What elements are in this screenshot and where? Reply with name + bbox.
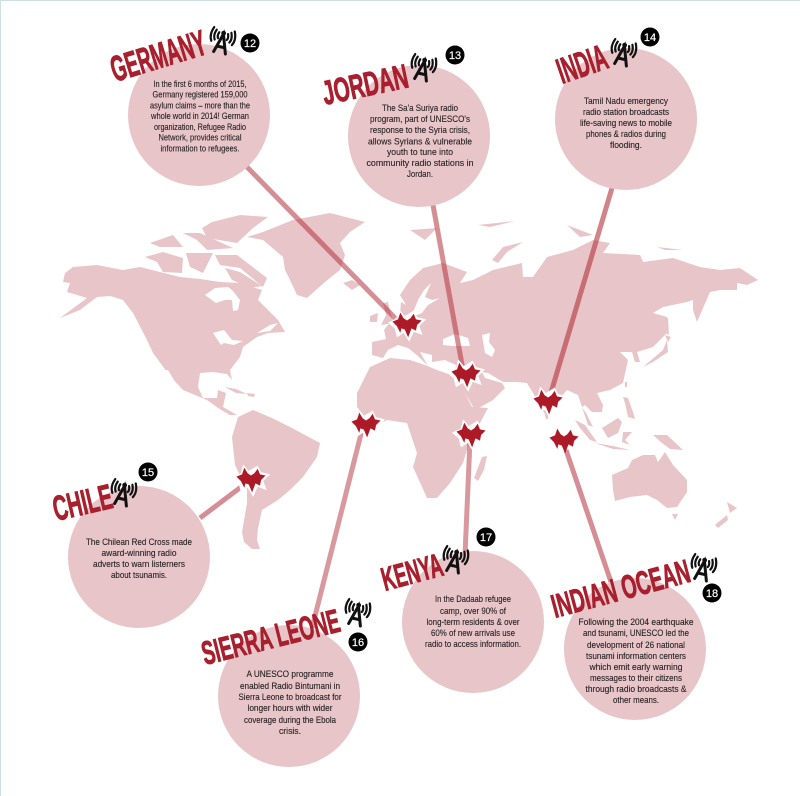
New Zealand [727, 502, 737, 513]
text: Indian Ocean: which emit early warning [589, 661, 682, 672]
number badge: 13 [446, 46, 464, 64]
North America [60, 265, 285, 415]
icon: radio antenna [343, 599, 371, 627]
text: Indian Ocean: tsunami information centers [586, 650, 686, 661]
number badge: 16 [348, 632, 368, 652]
text: Kenya: In the Dadaab refugee [435, 593, 511, 604]
burst marker: India [529, 386, 567, 419]
heading: Indian Ocean: INDIAN OCEAN [547, 552, 694, 625]
text: Sierra Leone: Sierra Leone to broadcast for [238, 691, 342, 702]
heading: Jordan: JORDAN [319, 58, 412, 113]
text: Jordan: allows Syrians & vulnerable [368, 136, 472, 146]
text: Chile [86, 536, 192, 580]
text: Jordan: community radio stations in [366, 157, 474, 168]
heading: India: INDIA [551, 36, 613, 92]
text: Indian Ocean [578, 616, 694, 705]
number badge: 16: 16 [352, 637, 364, 649]
text: Germany: information to refugees. [160, 142, 240, 154]
panel: Jordan [319, 46, 490, 207]
text: India: flooding. [610, 139, 642, 150]
text: Sierra Leone: A UNESCO programme [246, 668, 334, 679]
connector: India [550, 188, 612, 396]
text: Kenya: radio to access information. [425, 638, 521, 649]
number badge: 18: 18 [706, 588, 718, 600]
text: Jordan: response to the Syria crisis, [370, 124, 470, 135]
text: Jordan: Jordan. [407, 168, 433, 179]
number badge: 12 [240, 34, 260, 52]
heading: Sierra Leone: SIERRA LEONE [198, 602, 344, 672]
number badge: 12: 12 [244, 38, 256, 50]
text: India: Tamil Nadu emergency [584, 95, 668, 106]
Northern islands [492, 242, 523, 263]
text: Germany: asylum claims – more than the [150, 100, 250, 110]
number badge: 18 [702, 584, 722, 602]
text: Sierra Leone: longer hours with wider [248, 702, 332, 713]
Caribbean islands [225, 387, 247, 394]
burst marker: Sierra Leone [347, 409, 385, 442]
text: Chile: award-winning radio [102, 547, 176, 558]
seas and lakes [165, 283, 495, 385]
text: Indian Ocean: messages to their citizens [590, 672, 682, 683]
text: Kenya: 60% of new arrivals use [431, 627, 515, 638]
number badge: 13: 13 [449, 50, 461, 62]
text: Jordan: youth to tune into [387, 146, 453, 157]
text: India: phones & radios during [586, 128, 666, 139]
number badge: 17 [476, 528, 496, 546]
icon: radio antenna [441, 546, 469, 574]
number badge: 14 [640, 28, 660, 46]
icon: radio antenna [109, 479, 137, 507]
heading: Chile: CHILE [49, 477, 116, 529]
text: Indian Ocean: and tsunami, UNESCO led the [583, 627, 689, 638]
text: Sierra Leone [238, 668, 342, 736]
number badge: 15: 15 [142, 467, 154, 479]
panel: Sierra Leone [198, 599, 371, 767]
text: Kenya: long-term residents & over [426, 616, 520, 627]
number badge: 15 [138, 462, 158, 482]
South America [232, 410, 320, 549]
text: Germany: organization, Refugee Radio [154, 121, 246, 132]
text: Germany [150, 78, 250, 154]
number badge: 17: 17 [480, 532, 492, 544]
text: Sierra Leone: crisis. [279, 725, 301, 736]
connector: Germany [247, 167, 395, 318]
Iceland [343, 280, 360, 290]
text: Jordan: program, part of UNESCO's [370, 113, 470, 124]
heading: Kenya: KENYA [377, 546, 447, 598]
burst marker: Germany [388, 309, 426, 342]
text: Germany: whole world in 2014! German [150, 110, 249, 121]
world map [60, 213, 758, 549]
burst marker: Chile [232, 464, 270, 497]
icon: radio antenna [409, 54, 437, 82]
connector: Sierra Leone [312, 430, 362, 628]
connector: Indian Ocean [566, 450, 611, 582]
Eurasia [372, 240, 758, 418]
panel: Germany [105, 22, 270, 186]
burst marker: Indian Ocean [549, 429, 579, 453]
text: India [580, 95, 672, 150]
text: Chile: The Chilean Red Cross made [86, 536, 192, 547]
panel: India [551, 28, 697, 190]
number badge: 14: 14 [644, 32, 656, 44]
text: Sierra Leone: coverage during the Ebola [244, 714, 337, 725]
Greenland [247, 213, 365, 298]
burst marker: Jordan [447, 359, 485, 392]
panel: Kenya [377, 528, 544, 693]
connector: Jordan [433, 205, 463, 370]
Arctic islands [202, 215, 268, 243]
text: Jordan: The Sa'a Suriya radio [382, 102, 458, 113]
text: Kenya: camp, over 90% of [440, 605, 506, 616]
text: Indian Ocean: development of 26 national [587, 639, 685, 650]
text: India: radio station broadcasts [583, 106, 669, 117]
Africa [357, 358, 488, 498]
text: India: life-saving news to mobile [580, 117, 672, 128]
text: Indian Ocean: through radio broadcasts & [586, 683, 687, 694]
burst marker: Kenya [452, 419, 490, 452]
text: Jordan [366, 102, 474, 179]
text: Germany: Network, provides critical [158, 132, 242, 142]
text: Germany: In the first 6 months of 2015, [154, 78, 246, 89]
icon: radio antenna [609, 39, 637, 67]
Australia [612, 452, 687, 508]
text: Sierra Leone: enabled Radio Bintumani in [240, 680, 340, 691]
text: Kenya [425, 593, 521, 649]
Great Britain [381, 302, 394, 325]
icon: radio antenna [689, 554, 717, 582]
panel: Indian Ocean [547, 552, 722, 720]
text: Chile: adverts to warn listerners [93, 558, 185, 569]
text: Chile: about tsunamis. [111, 569, 167, 580]
panel: Chile [49, 462, 210, 628]
text: Indian Ocean: Following the 2004 earthquake [578, 616, 694, 627]
Madagascar [474, 456, 487, 481]
text: Germany: Germany registered 159,000 [152, 88, 248, 100]
connector: Chile [200, 484, 245, 518]
text: Indian Ocean: other means. [613, 694, 659, 705]
Ireland [370, 313, 378, 322]
icon: radio antenna [208, 27, 236, 55]
connector: Kenya [465, 440, 470, 555]
Asia-Pacific islands [582, 407, 593, 427]
